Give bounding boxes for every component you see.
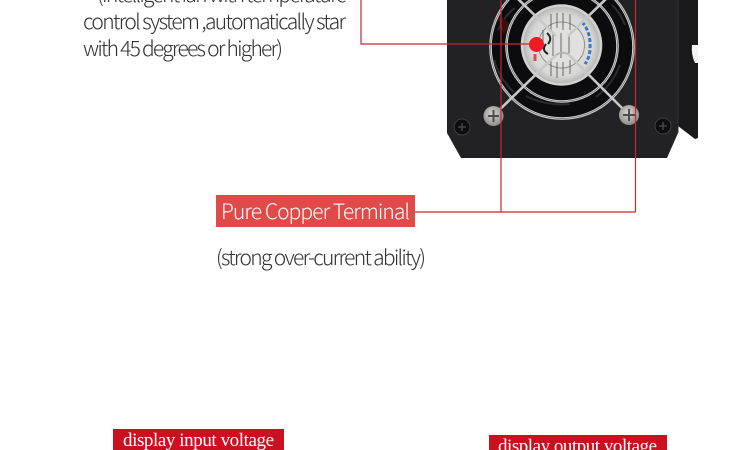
label: Pure Copper Terminal: Pure Copper Terminal xyxy=(221,196,410,226)
grille screw left xyxy=(484,106,504,126)
case screw left xyxy=(454,119,470,135)
leader lines: copper terminal xyxy=(415,0,636,212)
fan hub label xyxy=(522,6,600,84)
case screw right xyxy=(655,118,671,134)
grille rings xyxy=(490,0,634,118)
leader line: fan callout xyxy=(361,0,544,52)
grille ring shading xyxy=(490,0,634,118)
grille spokes xyxy=(493,0,629,116)
fan blades xyxy=(494,5,625,104)
cooling fan xyxy=(490,0,634,118)
device side flange xyxy=(670,0,698,139)
inverter device photo xyxy=(447,0,698,158)
callout: fan temperature control text: control system ,automatically star xyxy=(83,6,346,36)
callout: fan temperature control text: with 45 degrees or higher) xyxy=(83,33,283,63)
fan label print xyxy=(543,13,570,78)
fan housing xyxy=(490,0,634,118)
fan label red print xyxy=(534,54,536,61)
fan label recycle mark xyxy=(544,33,550,54)
text: strong over-current ability: (strong over-current ability) xyxy=(216,242,426,272)
fan marker dot xyxy=(529,37,544,52)
callout: fan temperature control text xyxy=(83,0,347,63)
grille screw right xyxy=(619,105,639,125)
fan label blue logo xyxy=(582,22,590,64)
device front body xyxy=(447,0,678,158)
